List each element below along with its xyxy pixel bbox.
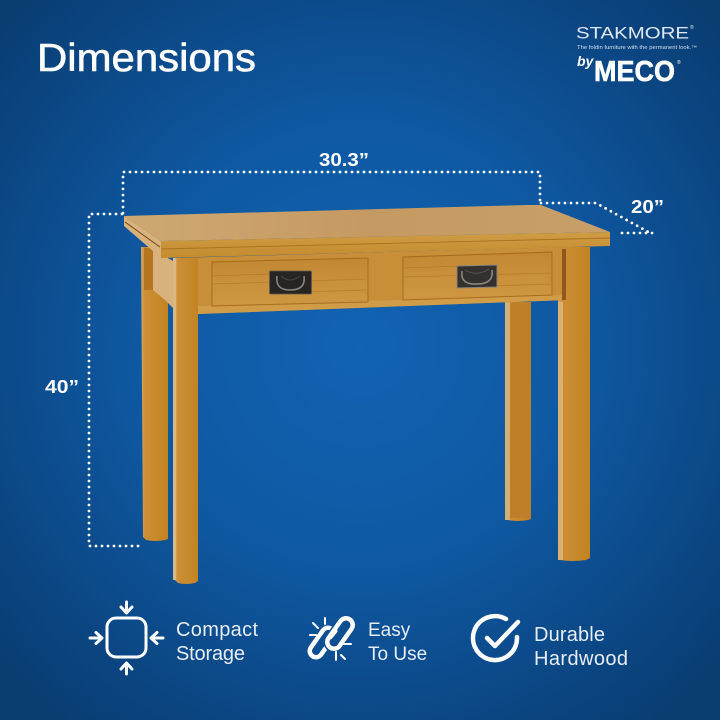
left handle [270,271,312,294]
apron with drawers [173,247,566,314]
front left leg [173,258,198,584]
icon: chain link [310,618,351,660]
label: 20 inches: 20” [631,196,664,217]
logo: Stakmore by Meco: ® [677,59,681,66]
text: easy to use: Easy [368,620,411,641]
side apron [153,250,175,310]
icon: check circle [473,616,518,660]
left drawer [212,258,368,306]
text: compact storage: Compact [176,619,258,641]
dimension line: width 30.3 [123,172,540,213]
logo: Stakmore by Meco: by [577,53,595,69]
feature: compact storage [90,602,264,674]
front right leg [558,247,590,561]
label: 40 inches: 40” [45,376,79,397]
icon: compress arrows [90,602,163,674]
text: compact storage: Storage [176,643,245,665]
logo: Stakmore by Meco [576,24,697,88]
logo: Stakmore by Meco: The foldin furniture with the permanent look.™ [577,45,697,51]
back left leg [141,247,168,541]
tabletop left edge [124,216,161,258]
right handle [457,265,497,288]
table [124,205,610,584]
right drawer [403,252,552,300]
text: easy to use: To Use [368,644,427,665]
logo: Stakmore by Meco: MECO [594,56,675,88]
text: durable hardwood: Hardwood [534,648,628,670]
dimension line: height 40 [89,214,139,546]
text: durable hardwood: Durable [534,624,605,646]
back right leg [505,302,531,521]
tabletop front edge [161,232,610,258]
logo: Stakmore by Meco: STAKMORE [576,24,689,42]
dimension line: depth 20 [541,203,652,234]
label: 30.3 inches: 30.3” [319,149,369,170]
feature: easy to use [310,618,427,665]
feature: durable hardwood [473,616,628,670]
tabletop surface [124,205,610,241]
logo: Stakmore by Meco: ® [690,24,694,31]
title: Dimensions [37,37,256,80]
